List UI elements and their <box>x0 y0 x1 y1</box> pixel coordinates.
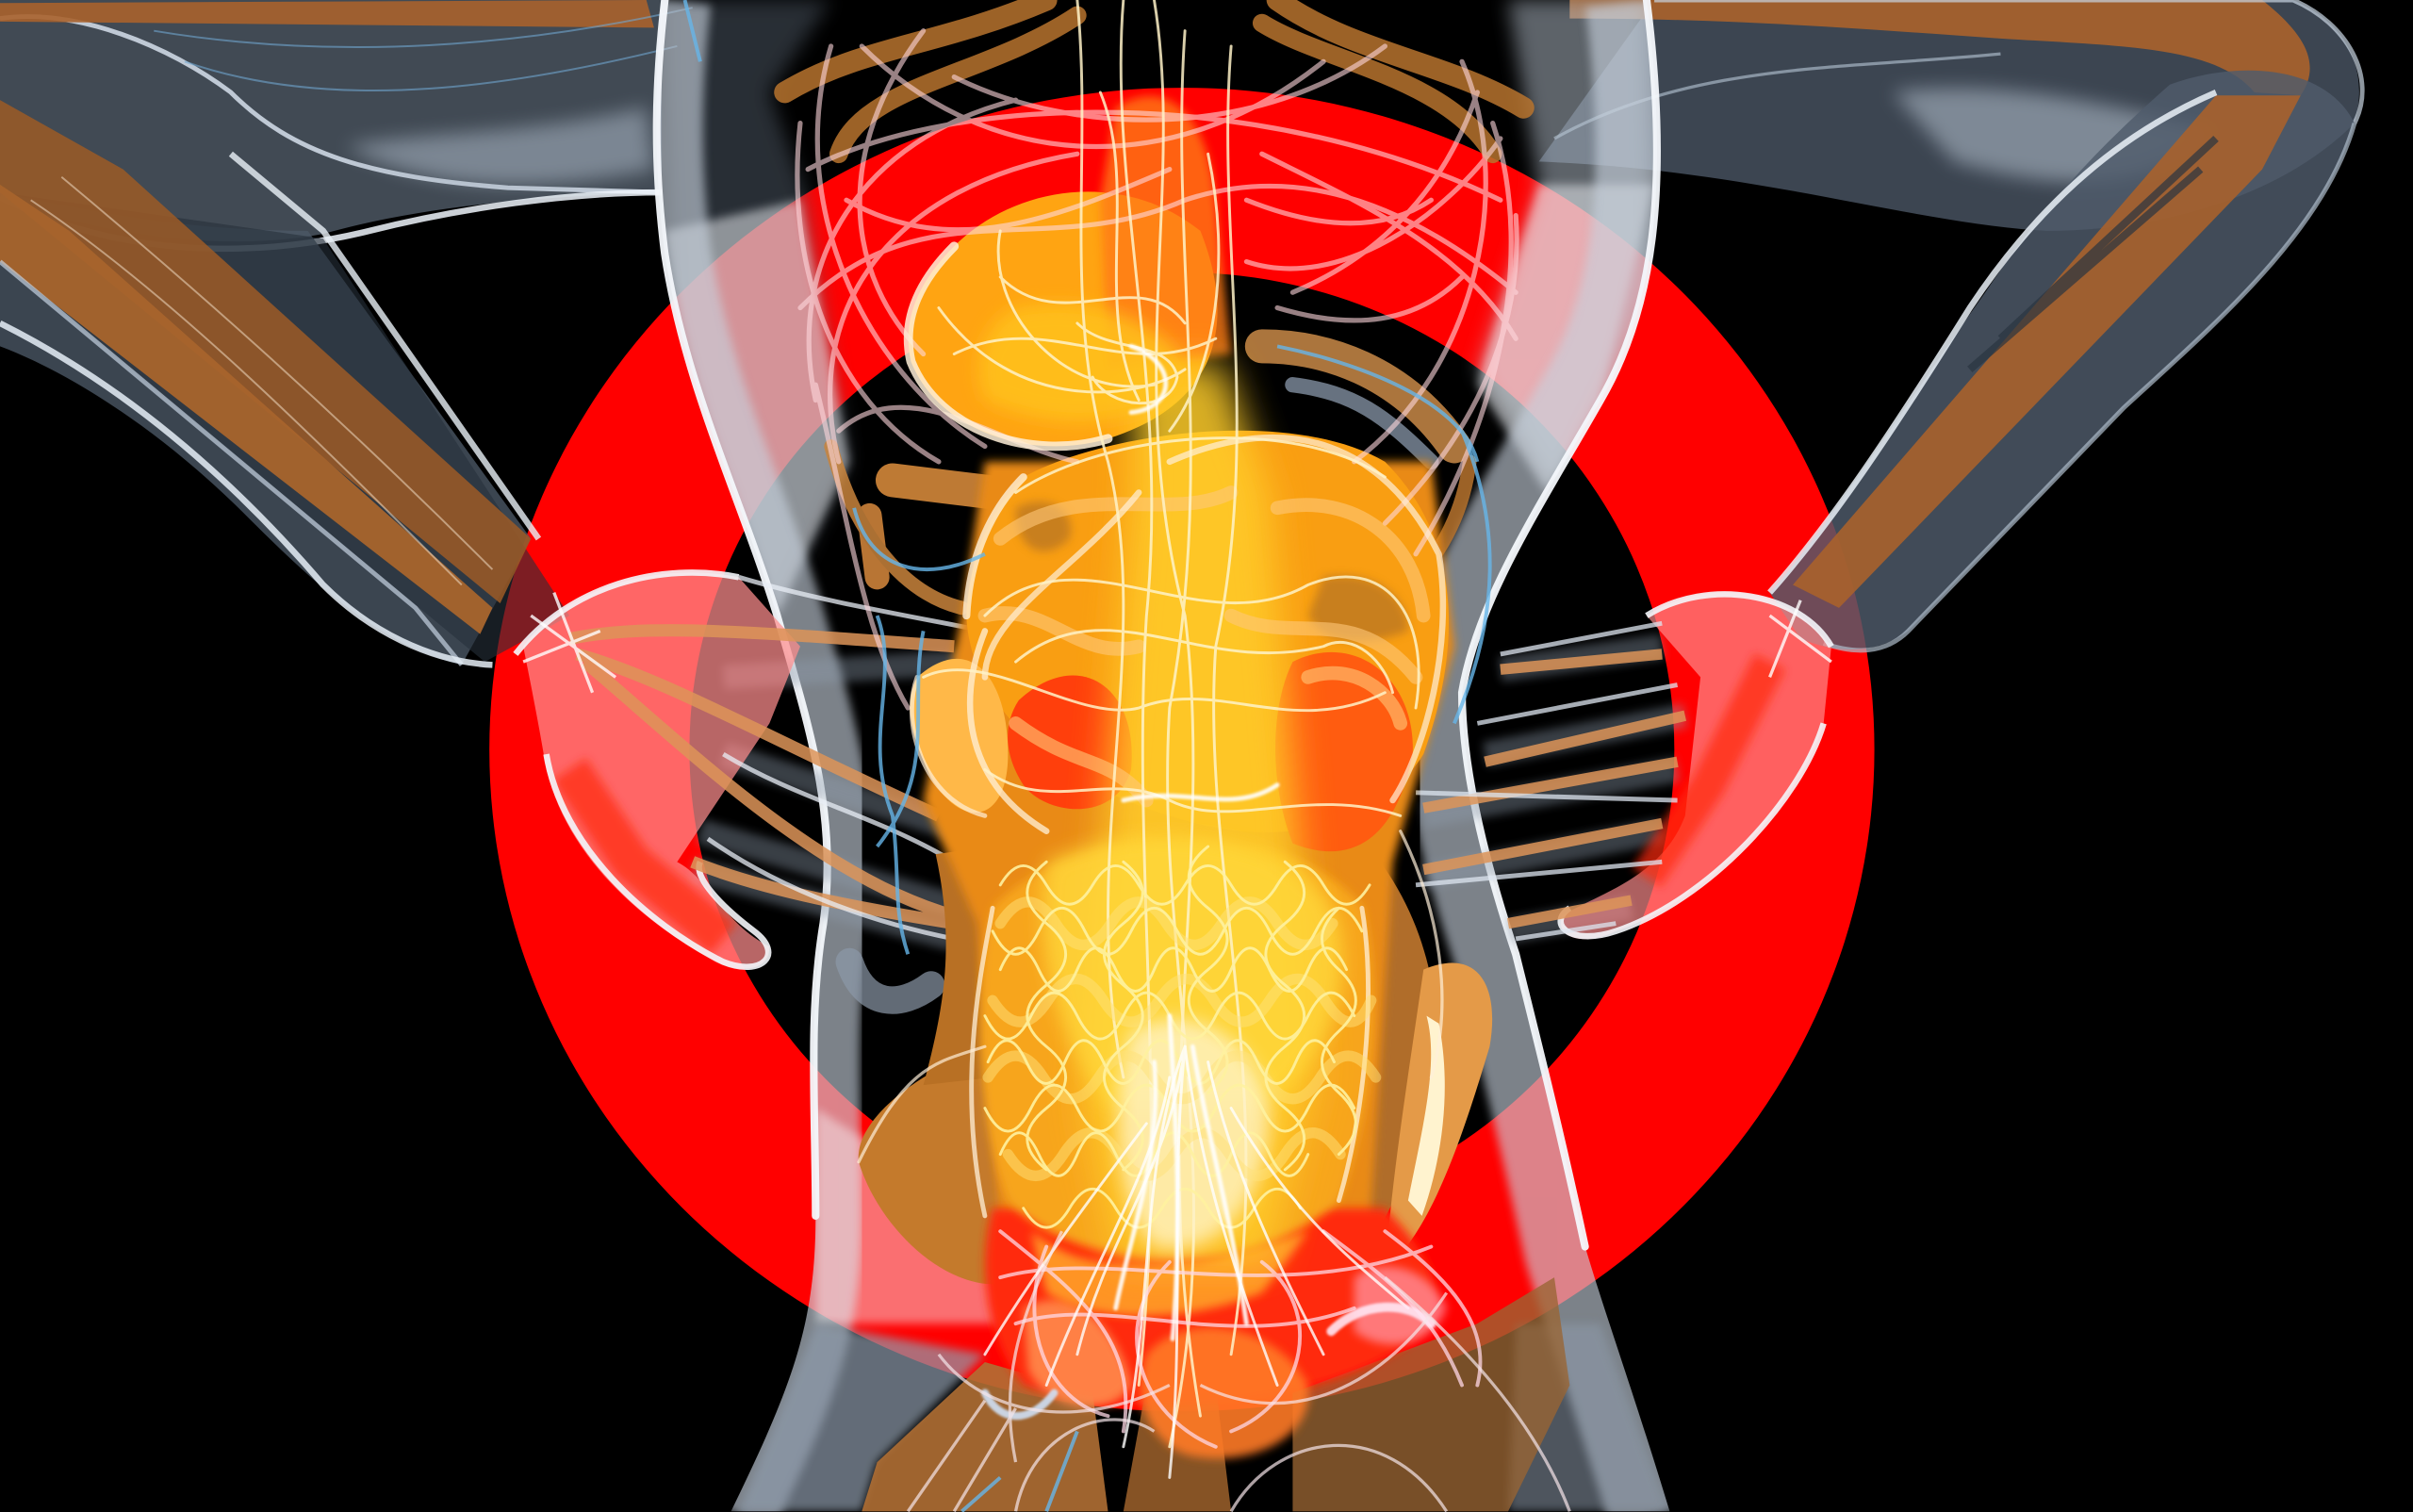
pelvis bones <box>859 839 1569 1511</box>
upper left arm <box>0 0 693 249</box>
left hand <box>516 572 985 969</box>
upper rib bones <box>785 0 1523 608</box>
thick glassy strands over chest <box>797 31 1517 708</box>
right hand <box>1416 592 1831 939</box>
lower spine and pelvis strands <box>908 1231 1569 1511</box>
red ring <box>489 88 1875 1411</box>
organs <box>909 96 1449 1258</box>
left kidney <box>1008 676 1132 809</box>
intestines <box>980 839 1373 1258</box>
nerves and vessels network <box>924 0 1419 1447</box>
organ outlines <box>859 246 1443 1216</box>
heart <box>909 191 1218 446</box>
upper right arm <box>1539 0 2362 231</box>
pink strands over lower organs <box>1000 1231 1481 1447</box>
left lower organ <box>911 659 1008 813</box>
blue vessels <box>685 0 1490 1511</box>
great vessels <box>1100 96 1231 370</box>
abdominal base fill joining organs <box>924 462 1454 1231</box>
torso outline highlights <box>657 0 1657 1247</box>
central bright column <box>1085 362 1316 1262</box>
torso shell walls <box>657 0 1669 1511</box>
liver dark patches <box>1016 501 1408 641</box>
lower left arm <box>0 100 569 665</box>
heart bright centre <box>978 304 1185 421</box>
bright highlights <box>985 346 1431 1416</box>
white hot lower centre <box>1118 1019 1270 1249</box>
lower red organs over ring <box>985 1208 1447 1458</box>
looping small intestine coils <box>988 902 1376 1175</box>
intestine bright centre <box>1042 837 1343 1109</box>
lower right arm <box>1770 71 2355 650</box>
liver and stomach <box>966 431 1449 832</box>
glassy stomach bands <box>985 492 1423 800</box>
right kidney <box>1275 652 1413 851</box>
white nerve bundle in lower abdomen <box>985 1046 1408 1477</box>
